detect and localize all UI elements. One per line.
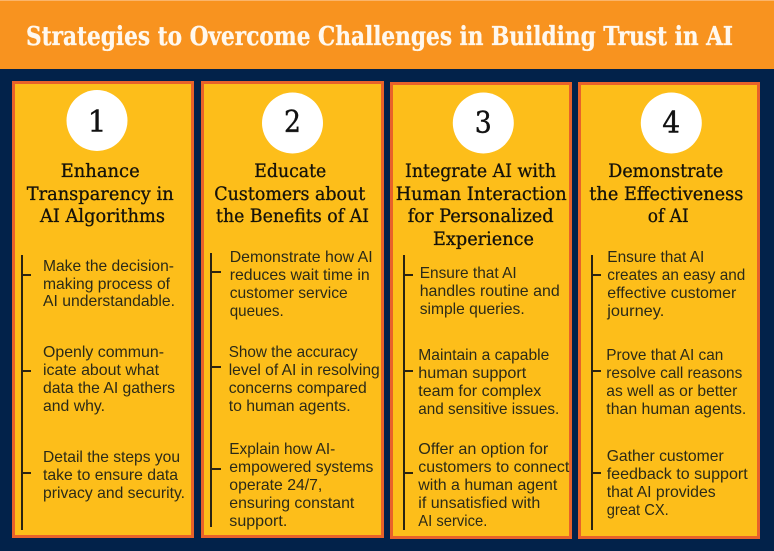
heading 2: Customers about bbox=[214, 184, 366, 205]
number badge 4: 4 bbox=[662, 106, 680, 141]
text: connect with agent: with a human agent bbox=[417, 477, 558, 494]
timeline 4 bbox=[592, 255, 601, 530]
text: wait time: queues. bbox=[230, 303, 284, 320]
text: customer journey bbox=[606, 249, 745, 320]
text: wait time bbox=[230, 249, 373, 320]
panel: strategy 4 bbox=[580, 84, 758, 538]
text: communicate about data: data the AI gathers bbox=[43, 380, 175, 397]
text: human support team bbox=[418, 347, 559, 418]
panel: strategy 1 bbox=[14, 82, 192, 536]
text: customer journey: effective customer bbox=[607, 285, 737, 302]
text: data privacy steps: privacy and security. bbox=[43, 485, 185, 502]
text: resolve call reasons: resolve call reasons bbox=[606, 365, 742, 382]
text: resolve call reasons bbox=[606, 347, 746, 418]
heading 2: Educate bbox=[254, 161, 326, 182]
text: wait time: reduces wait time in bbox=[230, 267, 370, 284]
text: make decisions understandable bbox=[43, 258, 175, 310]
heading 3: for Personalized bbox=[408, 206, 554, 227]
text: routine queries: simple queries. bbox=[420, 301, 525, 318]
panel: strategy 2 bbox=[202, 82, 382, 536]
timeline 3 bbox=[404, 255, 413, 530]
text: resolve call reasons: Prove that AI can bbox=[606, 347, 723, 364]
text: accuracy: level of AI in resolving bbox=[229, 362, 380, 379]
number badge 4 bbox=[641, 92, 702, 154]
text: constant support: support. bbox=[229, 513, 287, 530]
text: customer journey: Ensure that AI bbox=[607, 249, 704, 266]
text: resolve call reasons: as well as or better bbox=[606, 383, 738, 400]
text: accuracy: concerns compared bbox=[229, 380, 367, 397]
heading 2: the Benefits of AI bbox=[216, 206, 369, 227]
heading 3: Integrate AI with bbox=[405, 161, 556, 182]
number badge 2 bbox=[262, 92, 323, 154]
number badge 3: 3 bbox=[475, 106, 492, 141]
heading 4: the Effectiveness bbox=[589, 184, 743, 205]
text: customer feedback: Gather customer bbox=[607, 448, 724, 465]
text: data privacy steps: Detail the steps you bbox=[43, 449, 180, 466]
text: make decisions understandable: AI understandable. bbox=[43, 293, 175, 310]
heading 4 bbox=[589, 161, 743, 227]
text: accuracy bbox=[229, 344, 380, 415]
text: customer journey: creates an easy and bbox=[607, 267, 745, 284]
text: data privacy steps bbox=[43, 449, 185, 502]
text: human support team: Maintain a capable bbox=[418, 347, 549, 364]
number badge 3 bbox=[453, 92, 514, 154]
text: constant support: operate 24/7, bbox=[229, 477, 322, 494]
text: accuracy: Show the accuracy bbox=[229, 344, 358, 361]
text: routine queries: Ensure that AI bbox=[420, 265, 517, 282]
text: make decisions understandable: making process of bbox=[43, 276, 171, 293]
heading 4: of AI bbox=[648, 206, 689, 227]
text: communicate about data: and why. bbox=[43, 398, 105, 415]
text: customer feedback bbox=[607, 448, 748, 519]
header banner bbox=[0, 0, 774, 69]
text: communicate about data bbox=[43, 344, 175, 415]
text: connect with agent bbox=[417, 441, 570, 530]
heading 3: Experience bbox=[433, 229, 534, 250]
text: constant support: Explain how AI- bbox=[229, 441, 335, 458]
text: customer feedback: great CX. bbox=[607, 502, 669, 519]
heading 1: Enhance bbox=[61, 161, 140, 182]
text: communicate about data: Openly commun- bbox=[43, 344, 164, 361]
heading 3: Human Interaction bbox=[396, 184, 567, 205]
number badge 1 bbox=[66, 90, 128, 151]
text: connect with agent: if unsatisfied with bbox=[418, 495, 540, 512]
number badge 2: 2 bbox=[284, 105, 301, 140]
text: wait time: Demonstrate how AI bbox=[230, 249, 373, 266]
heading 2 bbox=[214, 161, 369, 227]
text: customer journey: journey. bbox=[606, 303, 664, 320]
text: customer feedback: feedback to support bbox=[607, 466, 748, 483]
text: wait time: customer service bbox=[230, 285, 348, 302]
number badge 1: 1 bbox=[87, 105, 107, 140]
text: constant support: empowered systems bbox=[229, 459, 373, 476]
heading 3 bbox=[396, 161, 567, 250]
text: customer feedback: that AI provides bbox=[607, 484, 716, 501]
text: human support team: human support bbox=[418, 365, 527, 382]
text: resolve call reasons: than human agents. bbox=[606, 401, 746, 418]
text: routine queries bbox=[420, 265, 560, 318]
heading 1: Transparency in bbox=[27, 184, 174, 205]
heading 4: Demonstrate bbox=[608, 161, 723, 182]
heading 1 bbox=[27, 161, 174, 227]
heading 1: AI Algorithms bbox=[39, 206, 165, 227]
text: routine queries: handles routine and bbox=[420, 283, 560, 300]
text: accuracy: to human agents. bbox=[229, 398, 351, 415]
text: connect with agent: AI service. bbox=[418, 513, 487, 530]
timeline 2 bbox=[211, 253, 221, 527]
panel: strategy 3 bbox=[392, 84, 570, 538]
text: human support team: team for complex bbox=[418, 383, 541, 400]
text: human support team: and sensitive issues. bbox=[418, 401, 559, 418]
text: data privacy steps: take to ensure data bbox=[43, 467, 178, 484]
text: connect with agent: Offer an option for bbox=[418, 441, 549, 458]
text: constant support: ensuring constant bbox=[229, 495, 355, 512]
text: constant support bbox=[229, 441, 373, 530]
text: connect with agent: customers to connect bbox=[418, 459, 570, 476]
timeline 1 bbox=[22, 255, 31, 530]
text: make decisions understandable: Make the decision- bbox=[43, 258, 174, 275]
text: communicate about data: icate about what bbox=[43, 362, 160, 379]
